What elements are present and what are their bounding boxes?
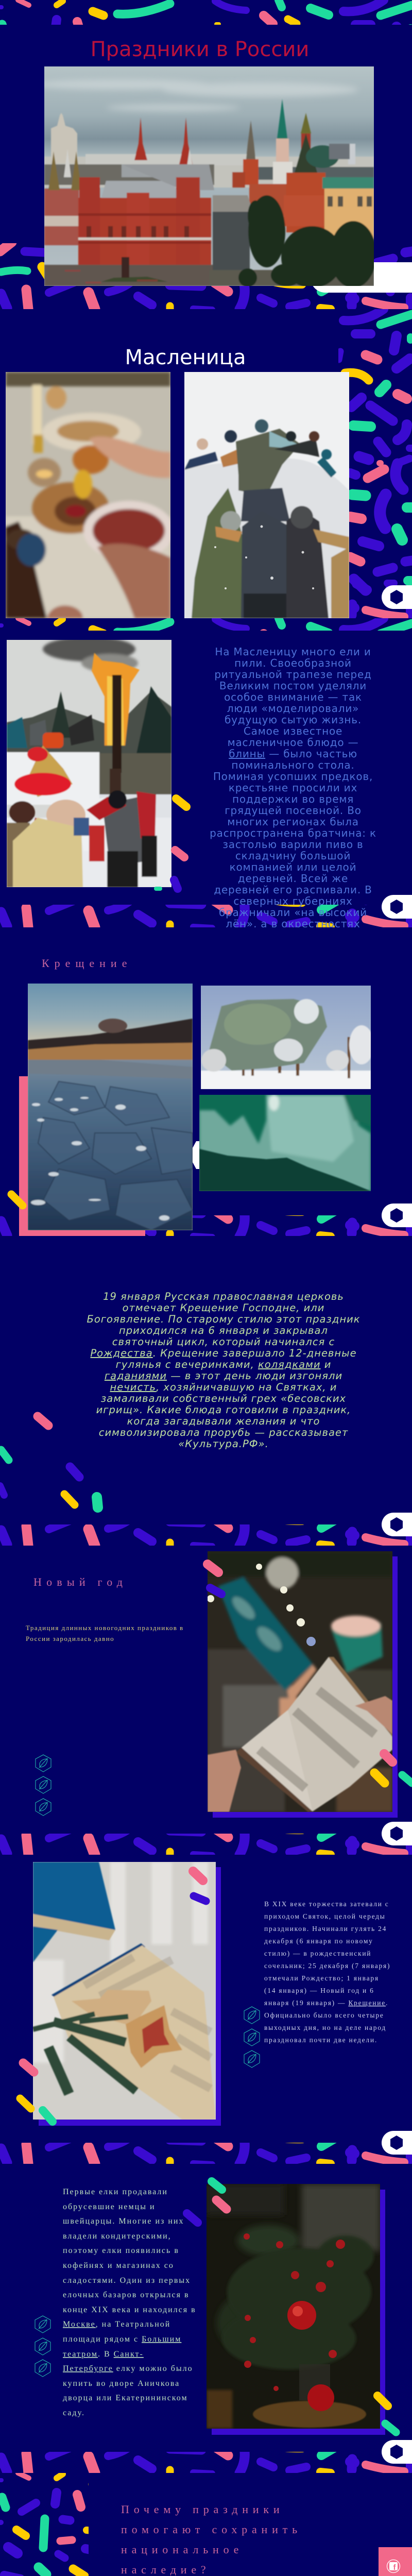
text block: первые елки [63, 2188, 196, 2417]
text block: Крещение description: когда загадывали желания и что [127, 1415, 320, 1427]
text block: Масленица description: пили. Своеобразной [234, 657, 352, 669]
text block: первые елки: площади рядом с Большим [63, 2335, 181, 2344]
confetti group left of section [0, 1416, 98, 1507]
text block: Масленица description: поминального стола. [231, 759, 355, 771]
text block: Масленица description: масленичное блюдо — [228, 736, 358, 749]
hex icons column 1 [36, 1755, 51, 1816]
text block: Масленица description: Поминая усопших предков, [213, 770, 373, 783]
text block: Масленица description: поддержки во время [232, 793, 354, 805]
text block: первые елки: владели кондитерскими, [63, 2232, 171, 2241]
photo: book and cookies [33, 1862, 216, 2120]
pink frame behind river photo [19, 1076, 145, 1236]
heading: Почему праздники: Почему праздники [121, 2503, 284, 2516]
text block: XIX век: Официально было всего четыре [264, 2011, 384, 2019]
text block: первые елки: Петербурге елку можно было [63, 2364, 193, 2373]
title: Праздники в России: Праздники в России [91, 38, 309, 61]
text block: XIX век: В XIX веке торжества затевали с [264, 1900, 389, 1908]
heading: Почему праздники: национальное [121, 2543, 243, 2556]
photo: frosted pines [201, 986, 371, 1089]
text block: XIX век: отмечали Рождество; 1 января [264, 1974, 379, 1982]
text block: первые елки: швейцарцы. Многие из них [63, 2217, 184, 2226]
text block: Новый год intro [26, 1624, 184, 1642]
text block: Масленица description: бражничали «на высокий [219, 906, 367, 919]
text block: Крещение description: 19 января Русская православная церковь [103, 1291, 344, 1302]
text block: XIX век: приходом Святок, целой череды [264, 1912, 386, 1920]
text block: Крещение description: отмечает Крещение Господне, или [123, 1302, 324, 1314]
text block: первые елки: елочных базаров открылся в [63, 2291, 190, 2299]
text block: Крещение description [87, 1291, 360, 1450]
hex icons column 3 [35, 2316, 50, 2377]
text block: Крещение description: приходился на 6 января и закрывал [119, 1325, 328, 1336]
text block: первые елки: саду. [63, 2409, 85, 2417]
purple frame: cookies photo [39, 1867, 221, 2126]
text block: Масленица description: будущую сытую жизнь. [225, 714, 362, 726]
text block: Масленица description: грядущей посевной. Во [225, 804, 362, 817]
photo: Moscow Red Square [44, 66, 374, 286]
text block: Новый год intro: России зародилась давно [26, 1635, 114, 1642]
text block: Масленица description: многих регионах была [227, 816, 359, 828]
confetti over fir photo [187, 2181, 396, 2432]
text block: первые елки: Первые елки продавали [63, 2188, 168, 2196]
text block: XIX век: декабря (6 января по новому [264, 1937, 373, 1945]
text block: XIX век [264, 1900, 390, 2044]
confetti: yellow dab [11, 1194, 23, 1206]
photo: frozen river [28, 984, 193, 1230]
text block: XIX век: выходных дня, но на деле народ [264, 2024, 386, 2031]
clip strip under description [0, 927, 412, 935]
photo: snow fortress climb [184, 372, 349, 618]
text block: Крещение description: замаливали собственный грех «бесовских [101, 1393, 346, 1404]
text block: Масленица description: Самое известное [244, 725, 342, 737]
text block: Масленица description: распространена братчина: к [210, 827, 376, 839]
text block: Крещение description: гаданиями — в этот день люди изгоняли [105, 1370, 342, 1382]
text block: XIX век: стилю) — в рождественский [264, 1950, 371, 1957]
text block: Масленица description: деревней. Всей же [238, 872, 348, 885]
text block: Масленица description: Великим постом уделяли [219, 680, 367, 692]
heading: Почему праздники [121, 2503, 302, 2576]
text block: Крещение description: символизировала прорубь — рассказывает [99, 1427, 348, 1438]
text block: Крещение description: Богоявление. По старому стилю этот праздник [87, 1313, 360, 1325]
text block: Масленица description: люди «моделировали» [227, 702, 359, 715]
heading: Новый год: Новый год [33, 1575, 127, 1588]
photo: socks and book [208, 1551, 392, 1812]
text block: Масленица description: северных губерниях [233, 895, 353, 907]
photo: man with torch [7, 640, 171, 887]
heading: Почему праздники: помогают сохранить [121, 2523, 302, 2536]
heading: Масленица: Масленица [125, 346, 246, 369]
hex icons column 2 [244, 2007, 260, 2067]
text block: Крещение description: нечисть, хозяйничавшую на Святках, и [110, 1381, 337, 1393]
social panel 1: f [393, 2563, 397, 2572]
text block: Масленица description: крестьяне просили их [229, 782, 357, 794]
text block: Масленица description [210, 646, 376, 930]
text block: XIX век: праздновал почти две недели. [264, 2036, 377, 2044]
confetti over book photo [208, 1564, 412, 1783]
text block: первые елки: купить во дворе Аничкова [63, 2379, 180, 2388]
photo: pancakes table [6, 372, 170, 618]
text block: Масленица description: компанией или целой [230, 861, 356, 873]
text block: XIX век: (14 января) — Новый год и 6 [264, 1987, 374, 1994]
text block: Масленица description: особое внимание — так [224, 691, 362, 703]
heading: Почему праздники: наследие? [121, 2563, 210, 2576]
white pill decorations [193, 262, 412, 2464]
extra confetti near torch photo [156, 799, 186, 889]
text block: Масленица description: складчину большой [235, 850, 351, 862]
text block: Масленица description: лён», а в окрестностях [226, 918, 360, 930]
text block: первые елки: сладостями. Один из первых [63, 2276, 191, 2285]
photo: green ice [199, 1095, 371, 1191]
text block: Масленица description: блины — было частью [229, 748, 357, 760]
text block: первые елки: обрусевшие немцы и [63, 2202, 156, 2211]
text block: Крещение description: Рождества. Крещение завершало 12-дневные [90, 1347, 357, 1359]
text block: XIX век: сочельник; 25 декабря (7 января) [264, 1962, 390, 1970]
text block: первые елки: конце XIX века и находился в [63, 2306, 196, 2314]
text block: Крещение description: святочный цикл, который начинался с [112, 1336, 335, 1348]
text block: Масленица description: деревней его распивали. В [214, 884, 372, 896]
photo: fir with red baubles [207, 2184, 380, 2429]
text block: первые елки: театром. В Санкт- [63, 2350, 144, 2359]
purple frame: fir photo [212, 2190, 385, 2435]
text block: первые елки: поэтому елки появились в [63, 2246, 179, 2255]
heading: Крещение: Крещение [42, 957, 132, 970]
text block: XIX век: праздников. Начинали гулять 24 [264, 1925, 387, 1933]
text block: Масленица description: ритуальной трапезе перед [214, 668, 372, 681]
purple frame: book photo [213, 1556, 398, 1818]
text block: Новый год intro: Традиция длинных новогодних праздников в [26, 1624, 184, 1632]
text block: Масленица description: застолью варили пиво в [222, 838, 364, 851]
text block: первые елки: дворца или Екатерининском [63, 2394, 188, 2402]
text block: Крещение description: игрищ». Какие блюда готовили в праздник, [96, 1404, 351, 1416]
text block: XIX век: января (19 января) — Крещение. [264, 1999, 388, 2007]
text block: Крещение description: гулянья с вечеринками, колядками и [116, 1359, 331, 1370]
social panel 1 [379, 2547, 412, 2576]
text block: первые елки: кофейнях и магазинах со [63, 2261, 174, 2270]
text block: Масленица description: На Масленицу много ели и [215, 646, 371, 658]
text block: первые елки: Москве, на Театральной [63, 2320, 170, 2329]
text block: Крещение description: «Культура.РФ». [178, 1438, 269, 1450]
confetti over cookies photo [20, 1871, 206, 2122]
